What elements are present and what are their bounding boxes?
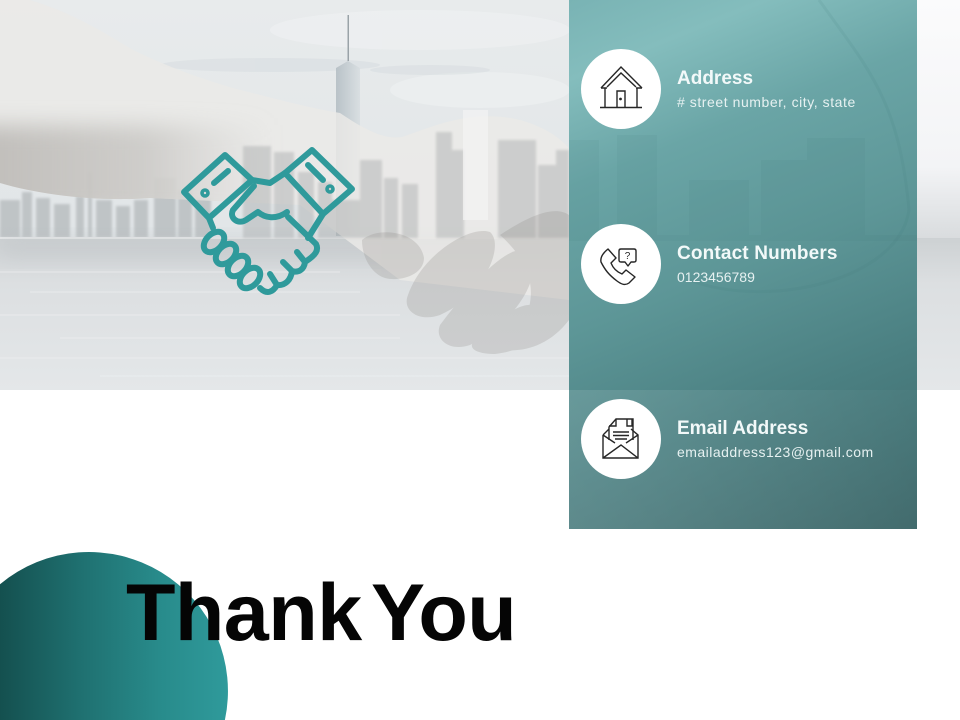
water ripples bbox=[0, 272, 570, 376]
contact: email bbox=[581, 399, 874, 479]
background photo: city skyline and handshake bbox=[0, 0, 960, 390]
contact: phone bbox=[581, 224, 838, 304]
arm bbox=[0, 64, 569, 300]
icon: open envelope with letter bbox=[581, 399, 661, 479]
text: address: # street number, city, state bbox=[677, 94, 856, 110]
ghost skyline in panel bbox=[569, 0, 917, 390]
hands bbox=[362, 211, 569, 354]
water bbox=[0, 238, 570, 390]
decorative circle bbox=[0, 552, 228, 720]
icon: house bbox=[581, 49, 661, 129]
icon: handshake bbox=[181, 147, 355, 295]
panel: contact details bbox=[569, 0, 917, 529]
heading: address: Address bbox=[677, 68, 753, 89]
lighter lower section bbox=[569, 390, 917, 529]
icon: phone with question bubble: ? bbox=[625, 251, 631, 262]
right side photo strip: white sleeve bbox=[917, 0, 960, 238]
heading: contact numbers: Contact Numbers bbox=[677, 243, 838, 264]
heading: email address: Email Address bbox=[677, 418, 808, 439]
title: Thank You bbox=[126, 568, 516, 658]
icon: phone with question bubble bbox=[581, 224, 661, 304]
central skyline seen through arm bbox=[243, 132, 569, 238]
contact: address bbox=[581, 49, 856, 129]
text: email: emailaddress123@gmail.com bbox=[677, 444, 874, 460]
text: phone number: 0123456789 bbox=[677, 269, 755, 285]
tall tower bbox=[336, 15, 360, 236]
left skyline bbox=[0, 172, 960, 238]
